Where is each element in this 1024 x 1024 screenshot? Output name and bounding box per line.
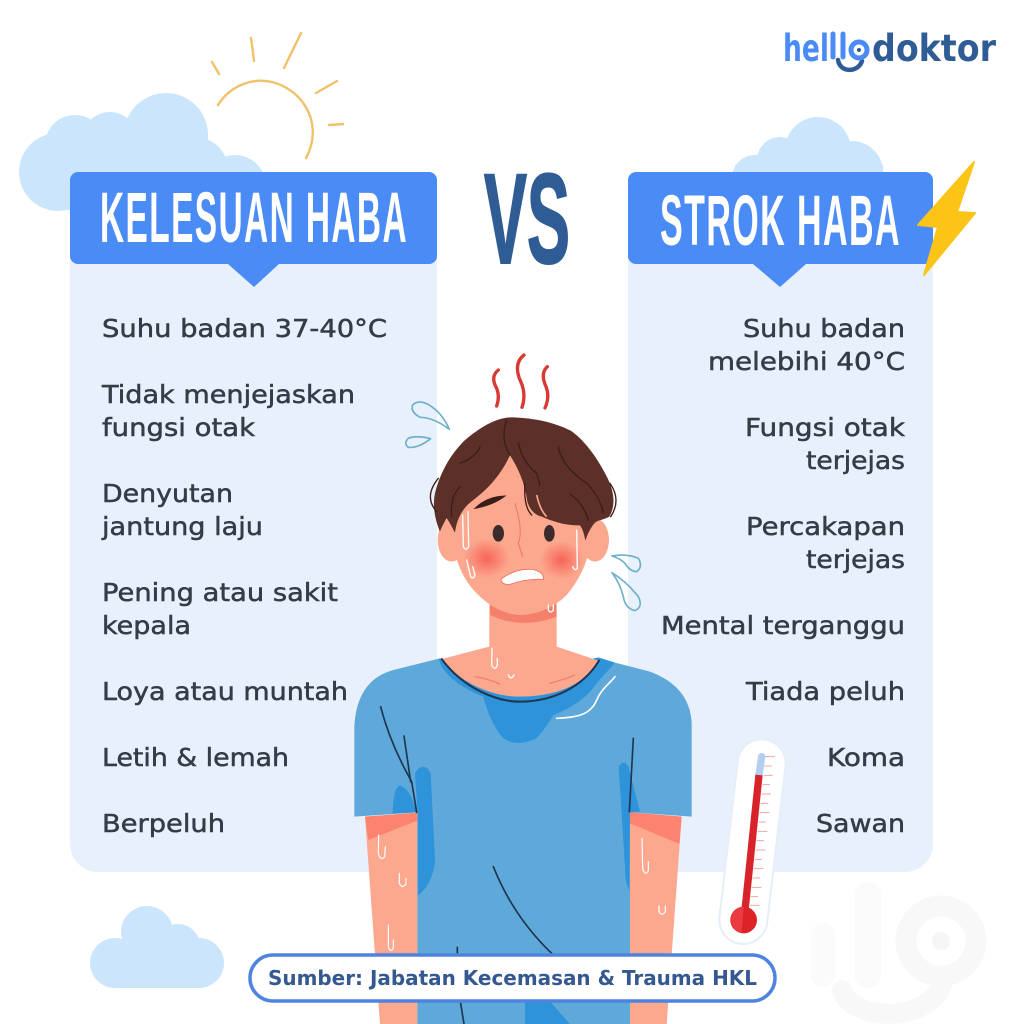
callout: source: Sumber: Jabatan Kecemasan & Trauma HKL	[268, 966, 757, 990]
logo: hello doktor: hel	[783, 27, 829, 70]
heading: kelesuan haba: KELESUAN HABA	[100, 179, 408, 258]
text list: kelesuan haba symptoms: Loya atau muntah	[102, 677, 348, 706]
text list: strok haba symptoms: terjejas	[806, 545, 905, 574]
nose	[515, 503, 523, 557]
face	[453, 447, 592, 615]
logo: hello doktor: doktor	[872, 27, 997, 70]
icon: thermometer	[730, 757, 775, 933]
mouth	[501, 569, 543, 584]
sweat patches	[393, 657, 640, 1024]
panel: strok haba	[628, 172, 933, 872]
text list: strok haba symptoms: Sawan	[816, 809, 905, 838]
text list: strok haba symptoms: melebihi 40°C	[708, 347, 905, 376]
eyebrow	[475, 496, 505, 508]
text list: strok haba symptoms: Suhu badan	[743, 314, 905, 343]
text list: kelesuan haba symptoms	[101, 314, 387, 838]
ears	[438, 518, 466, 562]
shirt	[354, 658, 692, 1024]
icon: sun	[212, 33, 343, 158]
text list: kelesuan haba symptoms: Tidak menjejaskan	[101, 380, 355, 409]
right arm	[630, 812, 682, 1024]
text list: strok haba symptoms: Percakapan	[746, 512, 905, 541]
hair	[434, 417, 613, 541]
text list: strok haba symptoms	[661, 314, 906, 838]
drops	[406, 402, 640, 611]
watermark logo	[823, 895, 976, 1014]
cheeks	[463, 538, 510, 578]
text list: kelesuan haba symptoms: Berpeluh	[102, 809, 225, 838]
neck and shoulders	[442, 597, 598, 697]
text list: strok haba symptoms: Koma	[827, 743, 905, 772]
arm sweat	[378, 835, 665, 950]
text list: strok haba symptoms: terjejas	[806, 446, 905, 475]
cloud: top right	[732, 117, 883, 203]
text list: kelesuan haba symptoms: Suhu badan 37-40°C	[102, 314, 387, 343]
eyes	[493, 525, 504, 542]
body and shirt	[354, 657, 692, 1024]
cloud: bottom left	[90, 906, 224, 988]
heading: strok haba	[628, 172, 933, 287]
text list: kelesuan haba symptoms: kepala	[102, 611, 191, 640]
logo: hello doktor	[783, 27, 997, 70]
face sweat	[463, 512, 577, 678]
panel: kelesuan haba	[70, 172, 437, 872]
collar	[442, 659, 599, 702]
fold lines	[381, 707, 633, 1024]
text list: strok haba symptoms: Tiada peluh	[745, 677, 905, 706]
icon: lightning bolt	[918, 162, 975, 275]
heading: VS: VS	[484, 148, 570, 291]
cloud: top left	[19, 93, 266, 217]
hair strands	[430, 420, 616, 520]
head and neck	[406, 355, 640, 702]
text list: kelesuan haba symptoms: jantung laju	[101, 512, 263, 541]
left arm	[365, 813, 417, 1024]
text list: kelesuan haba symptoms: fungsi otak	[102, 413, 256, 442]
text list: strok haba symptoms: Fungsi otak	[745, 413, 906, 442]
text list: kelesuan haba symptoms: Pening atau sakit	[102, 578, 338, 607]
heat waves	[494, 355, 548, 408]
illustration: sweating man	[354, 355, 692, 1024]
text list: strok haba symptoms: Mental terganggu	[661, 611, 905, 640]
callout: source	[250, 955, 775, 1001]
heading: kelesuan haba	[70, 172, 437, 287]
text list: kelesuan haba symptoms: Letih & lemah	[102, 743, 289, 772]
text list: kelesuan haba symptoms: Denyutan	[102, 479, 233, 508]
